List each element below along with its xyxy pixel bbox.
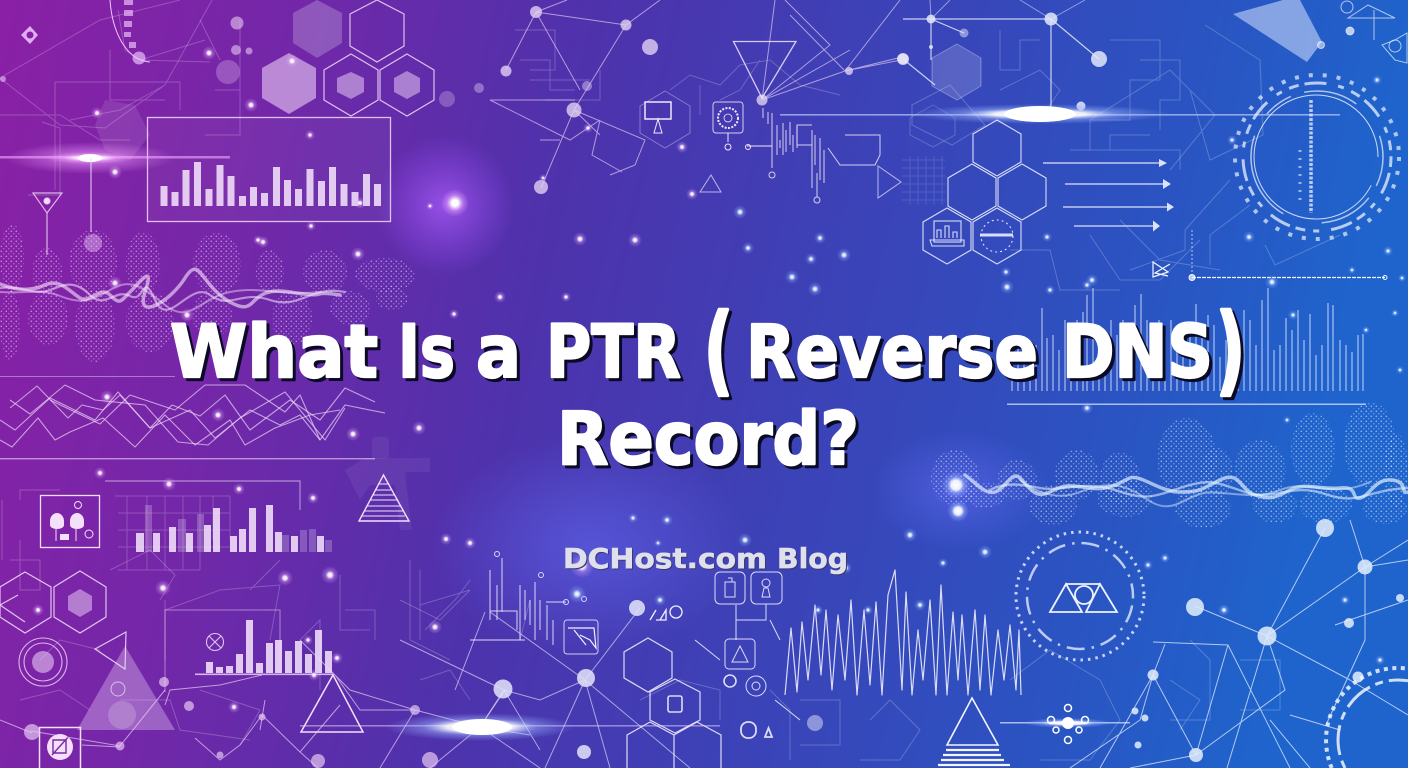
wave core lines right [965,475,1408,506]
icon: diamond marker [21,26,38,44]
icon: circled x [206,634,224,650]
flare top right [780,104,1340,124]
subtitle: DCHost.com Blog: Blog [777,543,848,575]
hexagon: darker filled [293,0,342,58]
arrow 2 [1065,179,1171,189]
arrow 1 [1043,159,1167,167]
small bowtie icon and dotted axis [1153,230,1387,280]
title: Is [398,310,455,395]
star particles violet [32,46,698,713]
icon frame: locks [40,496,100,548]
hexagon icon: connector [973,208,1021,264]
circuit nodes top left [0,16,455,107]
hexagon filled top right [932,44,981,100]
upper center network [474,0,909,194]
icon: monitor in hexagon [640,91,690,148]
glow stars on right wave [942,471,970,522]
icons top right corner [1318,1,1407,63]
outline hexagon faint [910,105,955,147]
hexagon: outline with core [324,54,378,116]
hexagons left [0,571,106,633]
node network bottom right [1070,519,1408,768]
tile: triangle [725,639,755,669]
hexagon cluster with icons [923,120,1046,264]
title: ) [1216,294,1245,406]
flare bottom center [300,713,720,741]
title: Record? [557,397,859,482]
bar chart in frame [148,118,390,222]
rule above line chart [0,376,175,377]
inverted triangle top center [734,42,796,98]
small triangles center [700,166,901,198]
small spike chart center bottom [470,552,586,645]
left line chart zigzags [0,385,385,447]
network around center bottom [400,600,823,768]
HUD circle top right [1235,75,1399,239]
tile: lab flask [715,572,745,604]
hexagon: outline with second core [380,54,434,116]
bar chart upper left [105,481,332,570]
flare and ring icon bottom right [1000,704,1130,744]
title: What [170,310,378,395]
wave core lines [0,269,345,312]
waveform bottom [785,570,1021,695]
hexagon: outline top [350,0,404,62]
star particles blue [628,75,1406,665]
icon: small shape cluster [650,606,682,620]
tile: bulb [751,572,782,604]
icon: gear in square [713,102,772,150]
tile icons center bottom [695,572,800,738]
small outline triangle [95,632,126,669]
arrows group [1043,159,1174,232]
striped triangle left [359,475,409,521]
subtitle: DCHost.com Blog: DCHost.com [563,543,767,575]
spike bar chart behind title right [1007,288,1366,405]
hexagon icon: dashboard [923,208,971,264]
hexagon group top left [262,0,434,116]
faint pentagon behind chart [95,100,150,160]
triangles emblem [1050,584,1117,612]
icon: gauge tile [564,620,598,654]
HUD dotted circle bottom [1016,532,1144,660]
title: PTR [546,310,681,395]
title: a [476,310,521,395]
small halo stars [441,189,970,603]
node network top right [898,0,1107,113]
icon: crossed circle in box [40,728,80,768]
subtitle: DCHost.com Blog [563,543,848,575]
title: ( [704,294,733,406]
translucent triangle [77,646,175,730]
light polygon top right [1233,0,1322,62]
title: Reverse [746,310,1038,395]
glyph pair [741,722,772,738]
flare top left [0,142,230,174]
outline triangle bottom [301,675,363,732]
title [170,294,1245,482]
dotted wave left [0,224,415,362]
decorative dashed arc top left [110,0,150,64]
dotted wave right [931,402,1408,528]
arrow 3 [1063,202,1174,212]
striped triangle bottom [938,698,1010,765]
hexagon: bright filled [262,53,316,114]
horizontal rule left [0,458,375,459]
concentric target icon [19,638,67,686]
bar chart lower [165,610,333,692]
honeycomb center bottom [624,638,721,768]
grid texture [902,156,945,205]
triangle marker left [33,158,91,255]
spike signal top center [763,108,880,203]
dotted arc bottom right [1326,668,1408,768]
node network bottom left [0,640,530,768]
tile: circle glyphs [724,675,766,696]
arrow 4 [1074,220,1160,232]
glow star near chart [441,189,469,217]
title: DNS [1062,310,1213,395]
glow star lower center [568,554,594,603]
ghost figure [345,437,430,530]
